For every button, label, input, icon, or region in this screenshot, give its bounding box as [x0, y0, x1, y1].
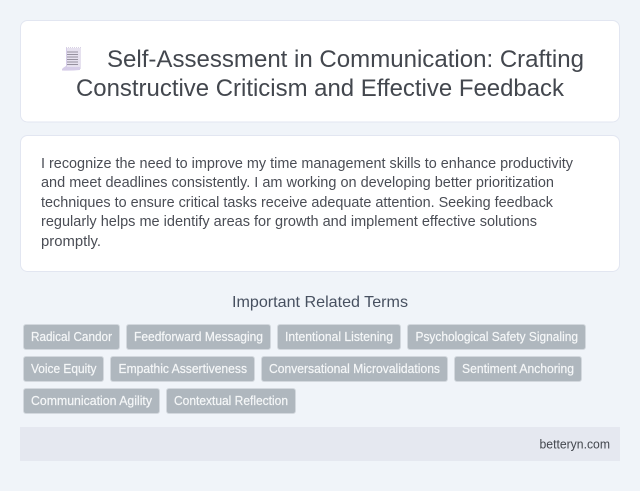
tag: Sentiment Anchoring: Sentiment Anchoring — [462, 362, 574, 376]
icon: document scroll — [62, 48, 81, 71]
description text: techniques to ensure critical tasks receive adequate attention. Seeking feedback — [41, 195, 554, 211]
tag: Contextual Reflection — [166, 388, 296, 414]
footer credit: betteryn.com — [540, 438, 610, 452]
tag: Contextual Reflection: Contextual Reflection — [174, 394, 288, 408]
panel: description card — [20, 136, 620, 272]
tag: Intentional Listening: Intentional Listening — [285, 330, 393, 344]
tag: Empathic Assertiveness: Empathic Assertiveness — [118, 362, 247, 376]
tag: Feedforward Messaging — [126, 324, 270, 350]
heading: important related terms: Important Related Terms — [232, 294, 408, 311]
tag: Voice Equity — [24, 356, 104, 382]
tag: Psychological Safety Signaling: Psychological Safety Signaling — [416, 330, 578, 344]
tag: Radical Candor: Radical Candor — [31, 330, 112, 344]
title text — [76, 46, 584, 102]
footer bar — [20, 427, 620, 461]
description text: regularly helps me identify areas for growth and implement effective solutions — [41, 214, 537, 230]
tag: Conversational Microvalidations: Conversational Microvalidations — [269, 362, 440, 376]
tag: Sentiment Anchoring — [454, 356, 582, 382]
panel: title card — [20, 20, 620, 122]
description text: promptly. — [41, 234, 101, 250]
tag: Communication Agility: Communication Agility — [31, 394, 153, 408]
tag: Empathic Assertiveness — [110, 356, 254, 382]
description text — [41, 156, 574, 250]
description text: and meet deadlines consistently. I am working on developing better prioritization — [41, 175, 554, 191]
title text: Self-Assessment in Communication: Crafting — [107, 46, 584, 73]
tag: Psychological Safety Signaling — [408, 324, 586, 350]
title text: Constructive Criticism and Effective Feedback — [76, 75, 565, 102]
tag: Voice Equity: Voice Equity — [31, 362, 97, 376]
description text: I recognize the need to improve my time management skills to enhance productivity — [41, 156, 574, 172]
tag: Radical Candor — [24, 324, 120, 350]
tag list — [24, 324, 586, 414]
tag: Communication Agility — [24, 388, 160, 414]
tag: Intentional Listening — [278, 324, 400, 350]
tag: Conversational Microvalidations — [262, 356, 448, 382]
tag: Feedforward Messaging: Feedforward Messaging — [134, 330, 263, 344]
